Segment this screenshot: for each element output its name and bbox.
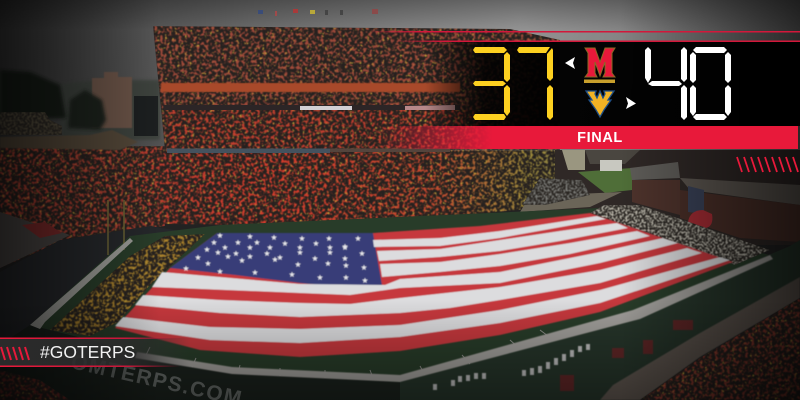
middle crowd tier xyxy=(140,150,620,226)
flag canton xyxy=(170,233,382,287)
front sideline xyxy=(135,255,773,382)
flag stars: ★ xyxy=(326,234,333,243)
flag stars: ★ xyxy=(312,254,319,263)
bottom-left crowd xyxy=(0,370,70,400)
flag stars: ★ xyxy=(183,264,190,273)
top overlay lines xyxy=(368,31,800,42)
american flag xyxy=(115,213,733,357)
flag stars: ★ xyxy=(195,253,202,262)
yard markers xyxy=(146,330,552,378)
flag stars: ★ xyxy=(215,248,222,257)
west virginia score 40 xyxy=(645,47,731,120)
stadium flags along roof xyxy=(258,9,378,16)
flag stars: ★ xyxy=(343,273,350,282)
flag stars: ★ xyxy=(205,259,212,268)
hashtag banner: #GOTERPS xyxy=(40,342,135,362)
flag stars: ★ xyxy=(327,248,334,257)
flag stars: ★ xyxy=(222,243,229,252)
flag stars: ★ xyxy=(299,234,306,243)
field sideline apron right xyxy=(400,240,800,400)
west virginia WV logo xyxy=(586,91,614,117)
goal posts xyxy=(108,200,124,255)
thin red line upper xyxy=(368,31,800,32)
flag stars: ★ xyxy=(313,239,320,248)
scoreboard panel xyxy=(425,42,800,126)
flag stars: ★ xyxy=(342,243,349,252)
flag stars: ★ xyxy=(239,256,246,265)
flag stars: ★ xyxy=(359,249,366,258)
maryland M logo xyxy=(584,48,615,83)
flag white stripes xyxy=(115,216,730,343)
final status band: FINAL xyxy=(577,130,623,146)
left stairs xyxy=(0,212,70,268)
winner arrow left xyxy=(565,57,575,69)
red seat patch xyxy=(22,222,62,238)
sky and distant backdrop xyxy=(0,0,800,160)
flag stars: ★ xyxy=(247,243,254,252)
flag stars: ★ xyxy=(217,231,224,240)
flag stars: ★ xyxy=(267,243,274,252)
flag stars: ★ xyxy=(235,238,242,247)
flag stars: ★ xyxy=(264,249,271,258)
bottom-left dark apron xyxy=(0,325,400,400)
flag stars: ★ xyxy=(295,260,302,269)
bottom right crowd xyxy=(640,298,800,400)
flag stars: ★ xyxy=(247,252,254,261)
thin red line lower xyxy=(395,40,800,42)
flag red field xyxy=(115,213,733,357)
upper stand block xyxy=(153,26,560,153)
flag stars: ★ xyxy=(325,259,332,268)
winner arrow right xyxy=(626,97,636,109)
left tan stand xyxy=(0,112,62,135)
flag stars: ★ xyxy=(271,233,278,242)
flag stars: ★ xyxy=(217,267,224,276)
flag stars: ★ xyxy=(254,238,261,247)
flag stars: ★ xyxy=(252,268,259,277)
flag stars: ★ xyxy=(225,252,232,261)
flag stars: ★ xyxy=(282,239,289,248)
sideline staff in white xyxy=(433,344,590,390)
flag stars: ★ xyxy=(211,238,218,247)
flag stars: ★ xyxy=(327,243,334,252)
flag stars: ★ xyxy=(297,243,304,252)
flag stars: ★ xyxy=(277,253,284,262)
final status band xyxy=(380,126,798,149)
right side buildings xyxy=(520,150,800,245)
flag stars: ★ xyxy=(362,276,369,285)
press box roof left xyxy=(0,130,138,150)
flag stars: ★ xyxy=(317,273,324,282)
marching band left xyxy=(50,234,205,336)
flag stars: ★ xyxy=(297,248,304,257)
flag stars: ★ xyxy=(272,255,279,264)
sideline red equipment xyxy=(560,320,693,391)
flag stars: ★ xyxy=(361,263,368,272)
maryland score 37 xyxy=(473,47,553,120)
left sideline xyxy=(30,238,133,329)
flag stars: ★ xyxy=(233,249,240,258)
flag stars: ★ xyxy=(343,261,350,270)
flag stars: ★ xyxy=(289,270,296,279)
hashtag banner xyxy=(0,338,190,367)
lower-left stands xyxy=(0,146,165,268)
flag stars xyxy=(183,231,369,285)
right hatch accent xyxy=(737,157,798,172)
marching band right xyxy=(590,205,770,265)
flag stars: ★ xyxy=(342,242,349,251)
flag stars: ★ xyxy=(204,245,211,254)
flag stars: ★ xyxy=(342,254,349,263)
left end zone dark field xyxy=(0,226,205,345)
main field xyxy=(30,208,780,382)
concrete track xyxy=(600,277,800,400)
flag stars: ★ xyxy=(355,234,362,243)
flag stars: ★ xyxy=(247,232,254,241)
